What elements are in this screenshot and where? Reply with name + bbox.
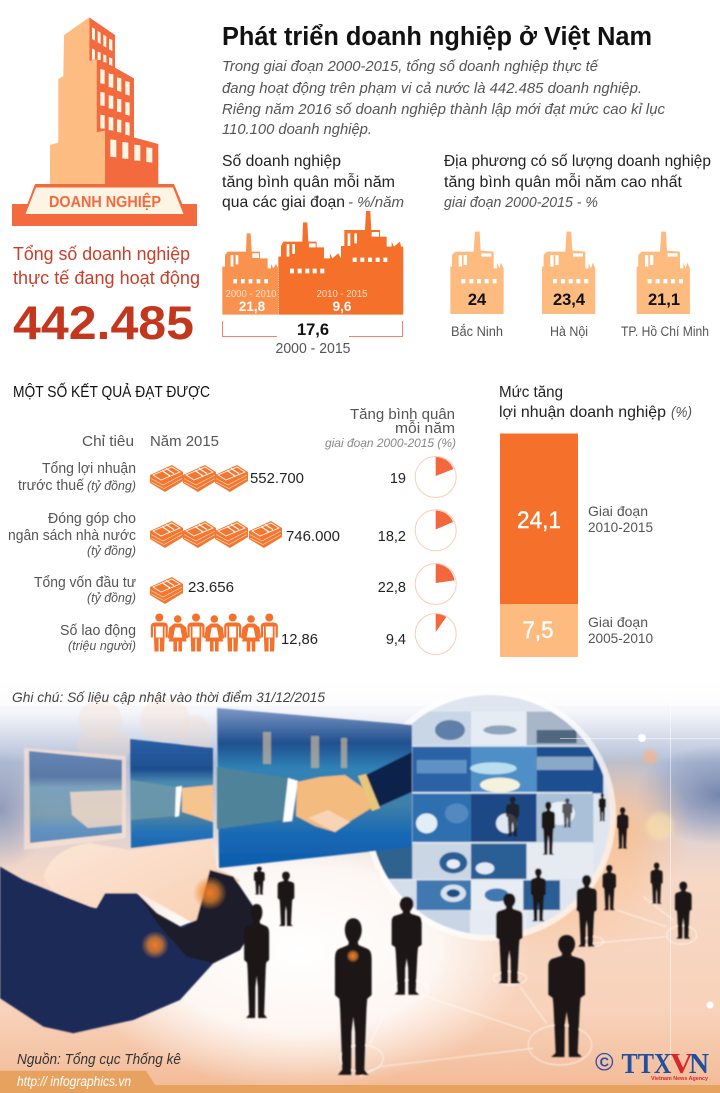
row: labour force: 12,86 [281,632,318,648]
heading: top localities: Địa phương có số lượng doanh nghiệp [444,153,711,170]
row: budget contribution [8,510,456,558]
intro text: Trong giai đoạn 2000-2015, tổng số doanh nghiệp thực tế [222,58,600,75]
heading: growth by period: qua các giai đoạn [222,194,345,211]
total label line 1: Tổng số doanh nghiệp [13,243,190,264]
heading: growth by period: tăng bình quân mỗi năm [222,172,395,191]
main card with handshake [217,708,412,868]
middle card [130,739,213,848]
row: total profit: (tỷ đồng) [87,478,136,493]
network lines [340,897,697,1077]
table headers: Chỉ tiêu [82,434,134,450]
row: total profit: Tổng lợi nhuận [42,461,136,477]
chart: profit growth stacked bar: Giai đoạn [588,503,648,519]
footer bar [0,1071,720,1093]
chart: profit growth stacked bar [500,434,653,657]
row: labour force: 9,4 [386,632,406,648]
row: budget contribution: (tỷ đồng) [87,543,136,558]
panel: Bắc Ninh: 24 [468,291,487,309]
chart: profit growth stacked bar: 2010-2015 [588,519,653,535]
panel: TP. Hồ Chí Minh: TP. Hồ Chí Minh [621,324,709,339]
chart: profit growth stacked bar: 24,1 [517,507,561,534]
bracket [222,321,402,336]
panel: Hà Nội: Hà Nội [550,324,588,339]
heading: profit growth: lợi nhuận doanh nghiệp [499,404,666,421]
period label 2000-2010: 2000 - 2010 [226,289,277,300]
logo: TTXVN: V [670,1049,693,1080]
row: total profit [18,456,456,498]
table headers: Tăng bình quân [350,406,455,423]
panel: TP. Hồ Chí Minh [621,232,709,339]
heading: growth by period: - %/năm [348,195,404,211]
factory 2010-2015 [278,211,403,315]
table headers: mỗi năm [395,420,455,437]
value 21,8: 21,8 [239,299,266,314]
intro text: 110.100 doanh nghiệp. [222,121,372,138]
row: budget contribution: ngân sách nhà nước [8,528,136,544]
logo: TTXVN [596,1049,709,1082]
row: labour force: (triệu người) [68,638,136,653]
row: total profit: 552.700 [250,471,304,487]
panel: Bắc Ninh: Bắc Ninh [451,324,503,339]
row: total investment: Tổng vốn đầu tư [34,575,136,591]
icon: signboard base [12,184,197,226]
logo: TTXVN: Vietnam News Agency [651,1076,709,1082]
row: total investment [34,564,456,605]
value 9,6: 9,6 [333,299,352,314]
icon: building [50,17,158,185]
panel: TP. Hồ Chí Minh: 21,1 [648,291,680,309]
row: labour force [60,614,456,654]
row: budget contribution: Đóng góp cho [48,511,136,527]
panel: Hà Nội: 23,4 [553,291,586,309]
chart: profit growth stacked bar: 2005-2010 [588,630,653,646]
panel: Bắc Ninh [450,232,504,339]
chart: profit growth stacked bar: Giai đoạn [588,614,648,630]
heading: top localities: tăng bình quân mỗi năm cao nhất [444,172,683,191]
intro text [222,58,665,138]
logo: TTXVN: C [600,1054,610,1070]
factory 2000-2010 [222,233,278,315]
panel: Hà Nội [542,232,595,339]
photo: business people, handshake and globe [0,680,720,1093]
heading: profit growth [499,384,692,421]
row: total investment: 23.656 [188,580,234,596]
website: http:// infographics.vn [17,1074,131,1089]
row: total investment: (tỷ đồng) [87,590,136,605]
sleeve [0,867,255,1033]
glows and sparkles [141,690,720,1060]
table headers [82,406,456,450]
row: budget contribution: 18,2 [378,529,406,545]
chart: factory growth by period [222,211,403,357]
title: Phát triển doanh nghiệp ở Việt Nam [222,23,652,51]
row: labour force: Số lao động [60,623,136,639]
intro text: Riêng năm 2016 số doanh nghiệp thành lập mới đạt mức cao kỉ lục [222,101,665,118]
note: Ghi chú: Số liệu cập nhật vào thời điểm 31/12/2015 [12,689,325,705]
table headers: giai đoạn 2000-2015 (%) [325,438,456,450]
heading: profit growth: Mức tăng [499,384,563,401]
period label 2010-2015: 2010 - 2015 [316,289,368,300]
total label line 2: thực tế đang hoạt động [13,267,200,288]
row: total profit: trước thuế [18,478,84,494]
row: total profit: 19 [390,471,406,487]
chart: profit growth stacked bar: 7,5 [522,617,554,644]
heading: results: MỘT SỐ KẾT QUẢ ĐẠT ĐƯỢC [13,381,210,401]
row: budget contribution: 746.000 [286,529,340,545]
heading: profit growth: (%) [671,405,692,421]
logo: TTXVN: TTX [622,1049,672,1080]
silhouettes right [392,793,692,1057]
total number: 442.485 [13,296,194,349]
far card [24,748,126,850]
heading: growth by period [222,153,404,211]
intro text: đang hoạt động trên phạm vi cả nước là 442.485 doanh nghiệp. [222,80,642,97]
heading: growth by period: Số doanh nghiệp [222,153,341,170]
row: total investment: 22,8 [378,580,406,596]
logo: TTXVN: N [689,1049,709,1080]
heading: top localities: giai đoạn 2000-2015 - % [444,195,598,211]
value 17,6: 17,6 [297,321,329,339]
total enterprises block [13,243,200,349]
table headers: Năm 2015 [150,434,219,450]
heading: top localities [444,153,711,211]
label: DOANH NGHIỆP: DOANH NGHIỆP [49,193,161,211]
period 2000-2015: 2000 - 2015 [276,341,350,357]
source: Nguồn: Tổng cục Thống kê [17,1052,181,1068]
globe [368,694,618,942]
hand [44,840,240,930]
silhouettes left [244,867,372,1075]
faint hand fingers [77,698,211,761]
